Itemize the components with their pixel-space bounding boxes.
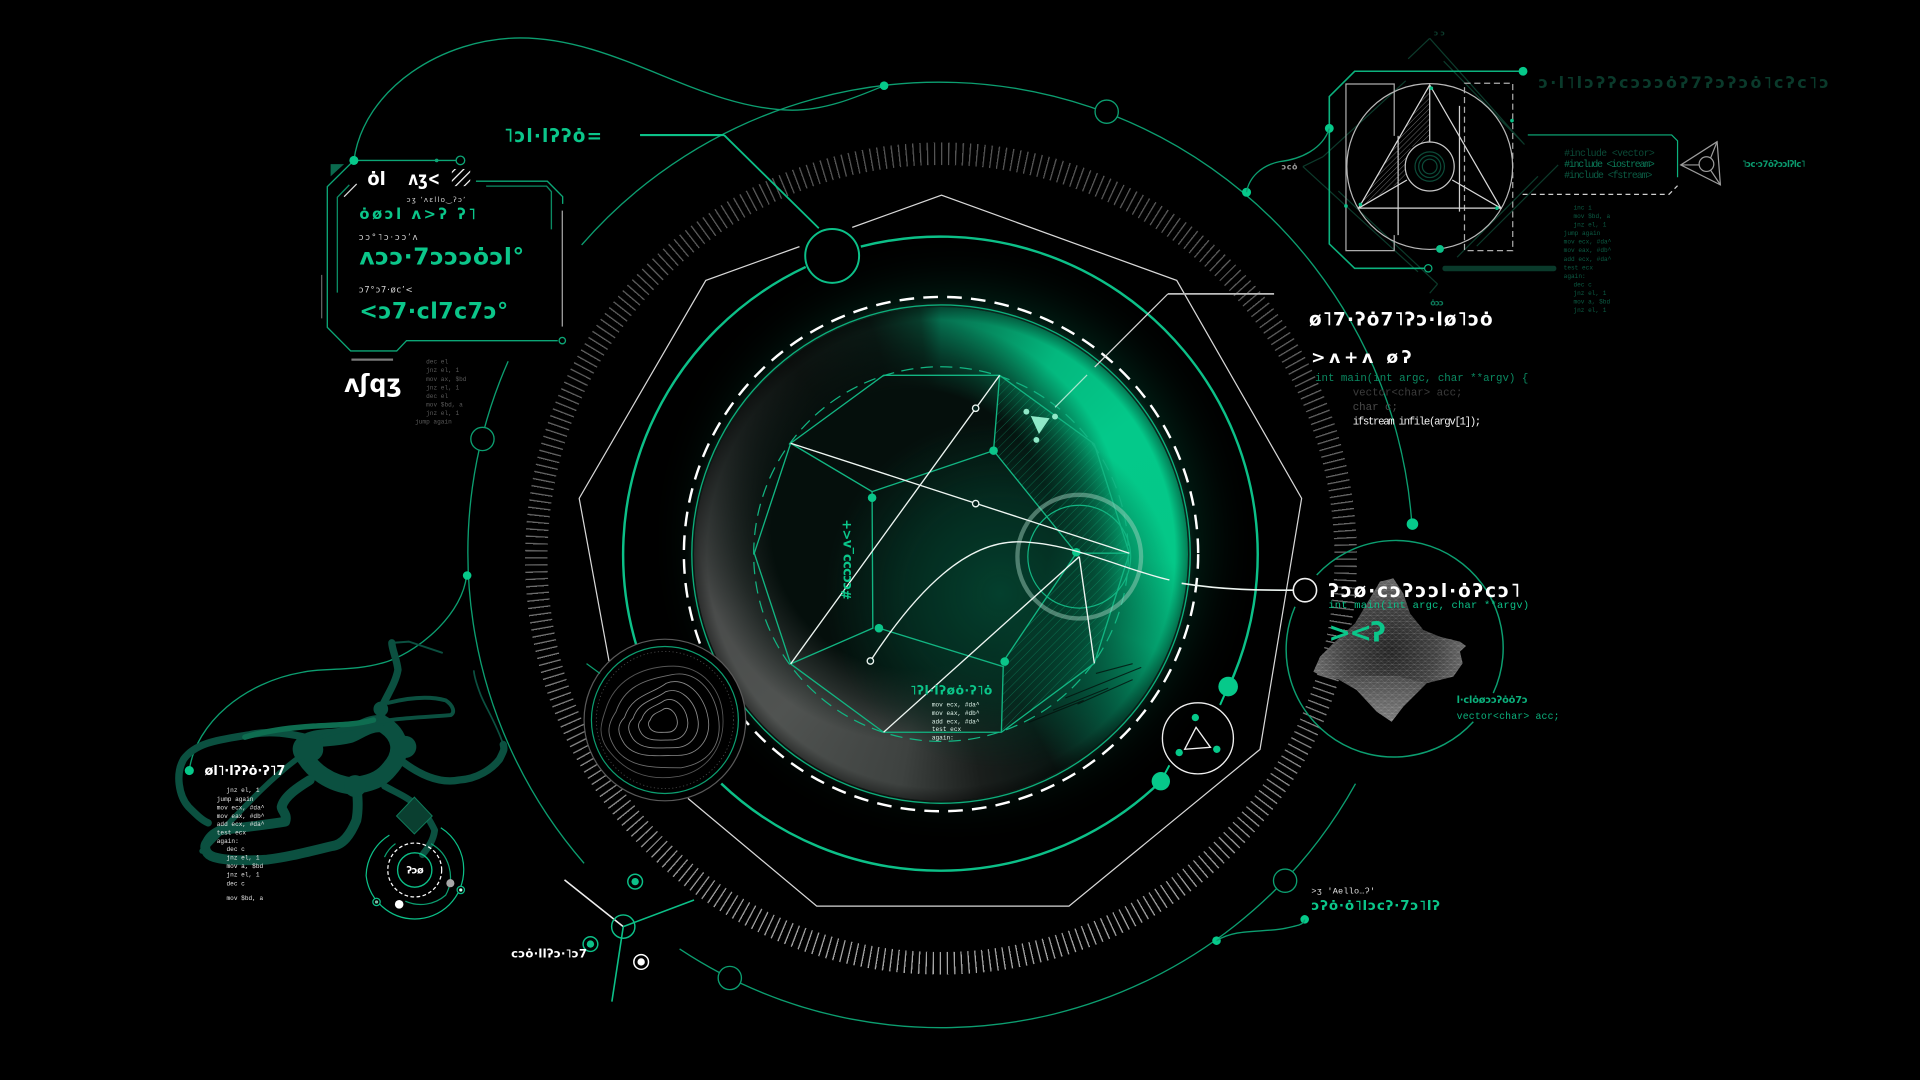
code block: assembly right: jnz el, 1 (1573, 290, 1607, 297)
green inner ring (623, 237, 1258, 871)
code block: assembly right: jnz el, 1 (1573, 222, 1607, 229)
badge: triangle orbit (1152, 677, 1238, 790)
dim heading top right: ɔ·l˥lɔʔʔᴄɔɔɔȯʔ7ʔɔʔɔȯ˥ᴄʔᴄ˥ɔ (1538, 73, 1829, 92)
code block: includes: #include <vector> (1564, 148, 1655, 159)
arc dots (463, 81, 1418, 945)
code block: tangle: mov a, $bd (227, 863, 264, 870)
code block: left panel: jump again (415, 419, 452, 426)
diagram small labels: ɔɔ (1434, 29, 1445, 38)
code block: left panel: mov $bd, a (426, 402, 463, 409)
hatch faces (994, 375, 1129, 732)
connector to small triangle (1523, 135, 1678, 194)
code block: includes: #include <iostream> (1564, 159, 1655, 170)
mountain panel (1286, 540, 1560, 757)
panel text: ɔɔ°˥ɔ·ɔɔʼʌ (359, 233, 418, 243)
code block: assembly right: add ecx, #da^ (1564, 256, 1612, 263)
code block: tangle: mov ecx, #da^ (217, 804, 265, 811)
sphere lower label: mov eax, #db^ (932, 710, 980, 717)
code block: assembly right: dec c (1573, 282, 1592, 289)
diamond on tangle (396, 797, 432, 834)
terrain mesh (1313, 578, 1466, 722)
code block: tangle: mov eax, #db^ (217, 813, 265, 820)
diagram small labels: ȯɔɔ (1430, 299, 1444, 308)
mountain panel: ><ʔ (1328, 618, 1386, 649)
outer arcs (468, 82, 1412, 1028)
diagram small labels (1282, 29, 1445, 308)
code block: assembly right: mov a, $bd (1573, 299, 1610, 306)
sphere lower label (910, 683, 992, 742)
marker triangle (1023, 409, 1058, 443)
sphere lower label: test ecx (932, 726, 962, 733)
panel text: ȯl (367, 169, 386, 190)
top right diagram (1247, 29, 1558, 308)
code block: assembly right: jnz el, 1 (1573, 307, 1607, 314)
heading: right white: ø˥7·ʔȯ7˥ʔɔ·lø˥ɔȯ (1309, 310, 1493, 331)
tick ring (525, 142, 1357, 975)
code block: assembly right: mov ecx, #da^ (1564, 239, 1612, 246)
code block: left panel: dec el (426, 393, 448, 400)
junction node bottom left (564, 874, 694, 1002)
panel text: <ɔ7·ᴄl7ᴄ7ɔ° (359, 299, 508, 324)
code block: assembly right (1564, 204, 1612, 314)
panel text (359, 169, 524, 324)
code block: tangle: jnz el, 1 (227, 872, 260, 879)
contour disc (584, 639, 746, 801)
panel text: ɔʒ ʼʌɛllo‿ʔɔʼ (407, 195, 465, 204)
code block: left panel: jnz el, 1 (426, 410, 459, 417)
code block: assembly right: jump again (1564, 230, 1601, 237)
white polygon frame (579, 195, 1302, 906)
sphere lower label: again: (932, 735, 954, 742)
code block: left panel: jnz el, 1 (426, 384, 459, 391)
orbit diagram (366, 828, 464, 919)
code block: tangle: add ecx, #da^ (217, 821, 265, 828)
left panel (322, 156, 565, 351)
orbit diagram: ʔɔø (407, 866, 424, 877)
code block: assembly right: mov $bd, a (1573, 213, 1610, 220)
code block: main: vector<char> acc; (1353, 388, 1463, 400)
code block: tangle: jnz el, 1 (227, 787, 260, 794)
code block: main: ifstream infile(argv[1]); (1353, 416, 1481, 428)
arc nodes (471, 100, 1297, 990)
mountain panel: ʔɔø·ᴄɔʔɔɔl·ȯʔᴄɔ˥ (1328, 581, 1520, 602)
bottom right label (1217, 886, 1440, 941)
code block: tangle: dec c (227, 846, 245, 853)
junction label: ᴄɔȯ·llʔɔ·˥ɔ7 (511, 947, 587, 961)
sphere lower label: mov ecx, #da^ (932, 702, 980, 709)
target ring (1017, 495, 1141, 618)
code block: left panel: dec el (426, 359, 448, 366)
code block: assembly right: again: (1564, 273, 1586, 280)
sphere rings (684, 297, 1198, 811)
code block: assembly right: inc i (1573, 204, 1592, 211)
code block: tangle (217, 787, 265, 902)
sphere surface scratches (1029, 664, 1141, 722)
diagram small labels: ɔᴄȯ (1282, 163, 1298, 172)
code block: left panel: mov ax, $bd (426, 376, 467, 383)
code block: main (1315, 373, 1528, 428)
code block: assembly right: test ecx (1564, 264, 1593, 271)
sphere lower label: ˥ʔl·lʔøȯ·ʔ˥ȯ (910, 683, 992, 697)
code block: tangle: jump again (217, 796, 254, 803)
code block: tangle: dec c (227, 880, 245, 887)
mountain panel: vector<char> acc; (1457, 711, 1560, 722)
code block: left panel (415, 359, 467, 426)
section label under panel: ʌʃqʒ (344, 369, 402, 398)
code block: tangle: test ecx (217, 829, 246, 836)
panel text: ʌʒ< (408, 169, 440, 190)
small triangle icon (1681, 142, 1720, 185)
panel text: ȯøɔl ʌ>ʔ ʔ˥ (359, 206, 476, 223)
small triangle label: ˥ɔᴄ·ɔ7ȯʔɔɔlʔlᴄ˥ (1742, 160, 1805, 170)
code block: tangle: mov $bd, a (227, 895, 264, 902)
code block: includes (1564, 148, 1655, 181)
panel frame (327, 156, 565, 351)
curve: top swoop (354, 38, 884, 160)
code block: tangle: again: (217, 838, 239, 845)
curve: tangle connector (189, 576, 467, 770)
rotated label in sphere: #ᴄᴄɔɔɔ_ʌ<+ (840, 519, 855, 600)
dark guide diamond (1303, 38, 1558, 293)
bottom right label: >ʒ 'Aello…ʔ' (1311, 886, 1375, 896)
title: upper left label: ˥ɔl·lʔʔȯ= (504, 126, 602, 147)
subheading: right white: >ʌ+ʌ øʔ (1311, 348, 1412, 368)
leader line to marker (1055, 294, 1274, 407)
connector: title line to ring node (640, 135, 859, 283)
polyhedron dots (868, 446, 1081, 666)
triangle with hatch (1359, 85, 1430, 208)
mountain panel: l·ᴄlȯøɔɔʔȯȯ7ɔ (1457, 695, 1528, 706)
polyhedron wireframe (754, 367, 1129, 741)
bottom right label: ɔʔȯ·ȯ˥lɔᴄʔ·7ɔ˥lʔ (1311, 899, 1440, 914)
code block: left panel: jnz el, 1 (426, 367, 459, 374)
code block: main: char c; (1353, 402, 1398, 414)
mountain panel: int main(int argc, char **argv) (1328, 600, 1529, 612)
white wire lines (791, 375, 1293, 732)
tangle label: øl˥·lʔʔȯ·ʔ˥7 (204, 764, 285, 779)
panel text: ʌɔɔ·7ɔɔɔȯɔl° (359, 243, 524, 270)
code block: tangle: jnz el, 1 (227, 855, 260, 862)
code block: includes: #include <fstream> (1564, 170, 1652, 181)
rectangles (1346, 83, 1513, 251)
tangle structure (179, 642, 504, 860)
code block: assembly right: mov eax, #db^ (1564, 247, 1612, 254)
panel: central sphere (694, 307, 1188, 801)
sphere lower label: add ecx, #da^ (932, 719, 980, 726)
outer bracket (1329, 71, 1523, 268)
code block: main: int main(int argc, char **argv) { (1315, 373, 1528, 385)
panel text: ɔ7°ɔ7·øᴄʼ< (359, 286, 413, 296)
